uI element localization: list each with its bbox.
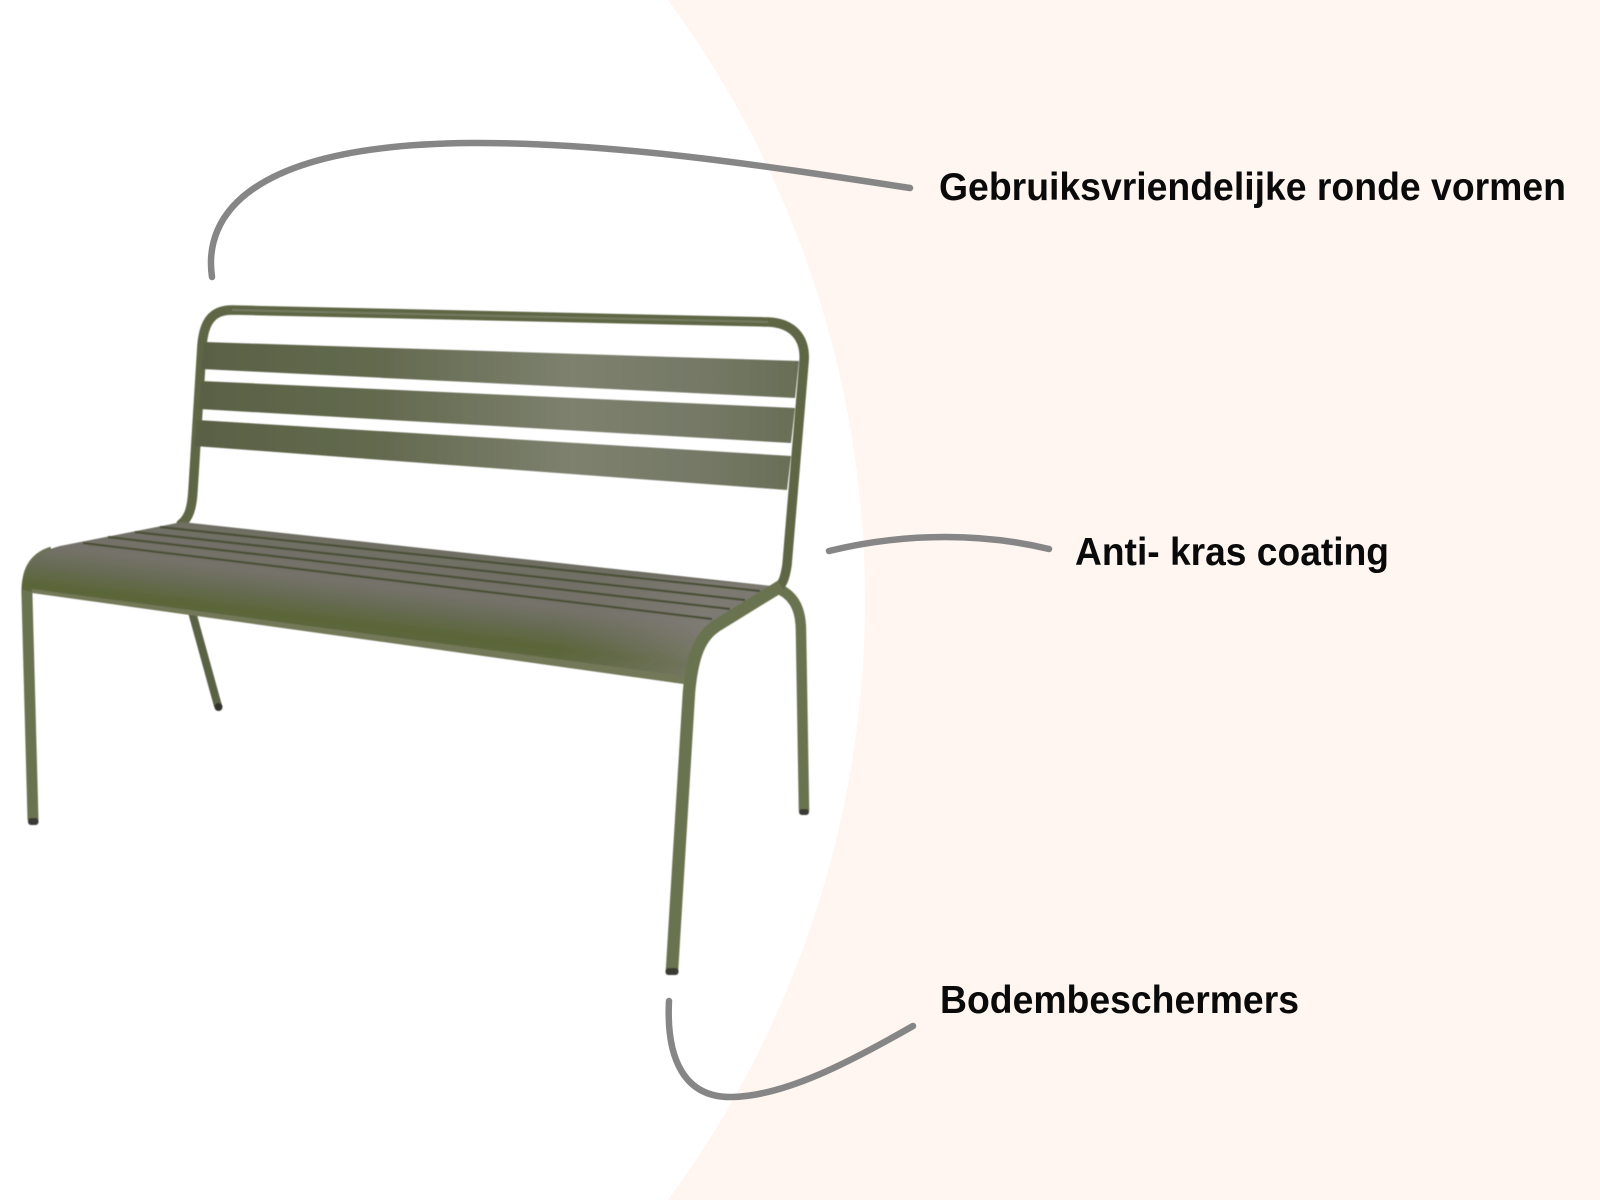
bench: front right foot xyxy=(666,968,678,975)
callout line: floor protectors xyxy=(669,1001,913,1097)
bench: seat right highlight xyxy=(560,570,772,684)
bench: backrest slat 3 xyxy=(194,420,791,490)
bench: front left leg xyxy=(27,552,52,820)
bench: backrest slat 1 xyxy=(201,342,799,398)
callout line: rounded shapes xyxy=(211,143,910,277)
bench: rear left leg xyxy=(192,612,218,706)
bench: backrest slat 2 xyxy=(199,381,795,443)
bench: seat xyxy=(22,522,772,684)
bench: seat slat gaps xyxy=(83,527,760,619)
bench: rear left foot xyxy=(214,703,222,711)
bench: front left foot xyxy=(28,818,38,825)
background: white circle segment xyxy=(0,0,865,1200)
bench illustration xyxy=(22,310,809,975)
bench: backrest frame highlight xyxy=(232,310,768,322)
label: rounded shapes: Gebruiksvriendelijke ronde vormen xyxy=(939,166,1566,209)
bench: rear right foot xyxy=(799,809,809,815)
bench: rear right leg xyxy=(781,590,804,811)
bench: front right leg and seat side xyxy=(672,586,781,970)
label: scratch coating: Anti- kras coating xyxy=(1075,531,1389,574)
bench: backrest frame xyxy=(181,310,804,590)
label: floor protectors: Bodembeschermers xyxy=(940,979,1299,1022)
bench: seat front lip xyxy=(32,589,684,684)
callout line: scratch coating xyxy=(829,537,1049,551)
